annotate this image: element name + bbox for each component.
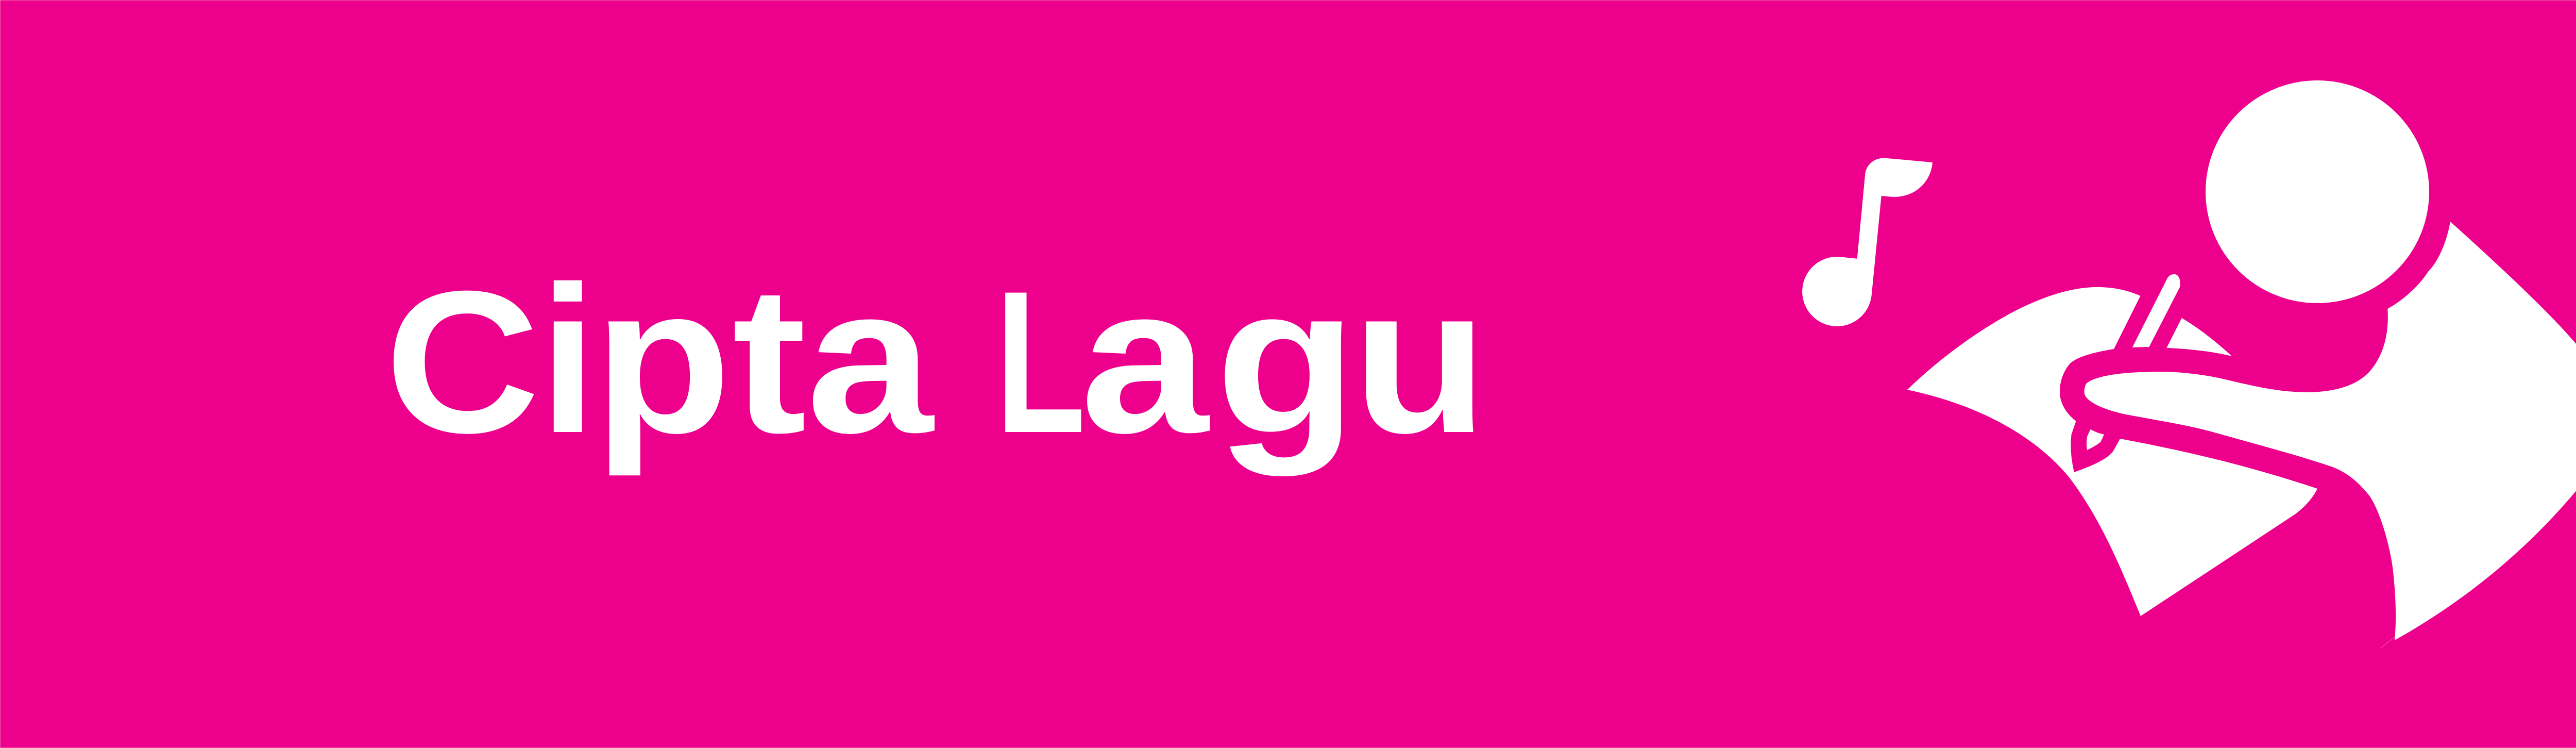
icon: pen nib opening	[2087, 429, 2104, 450]
title: L	[995, 249, 1086, 475]
icon: person writing a song	[1802, 80, 2576, 640]
title: u	[1352, 243, 1488, 477]
title: t	[732, 243, 806, 477]
title	[385, 243, 1488, 477]
title: a	[806, 243, 933, 477]
icon: paper sheet	[1907, 287, 2317, 616]
title: C	[385, 249, 540, 475]
title: g	[1215, 243, 1357, 477]
icon: head	[2206, 80, 2429, 303]
icon: paper corner by the pen	[2166, 318, 2232, 356]
title: a	[1080, 243, 1208, 477]
icon: body and arm	[2084, 222, 2576, 640]
icon: pen shaft	[2132, 274, 2180, 347]
title: i	[539, 243, 597, 477]
icon: music note	[1802, 158, 1933, 326]
title: p	[594, 243, 732, 477]
